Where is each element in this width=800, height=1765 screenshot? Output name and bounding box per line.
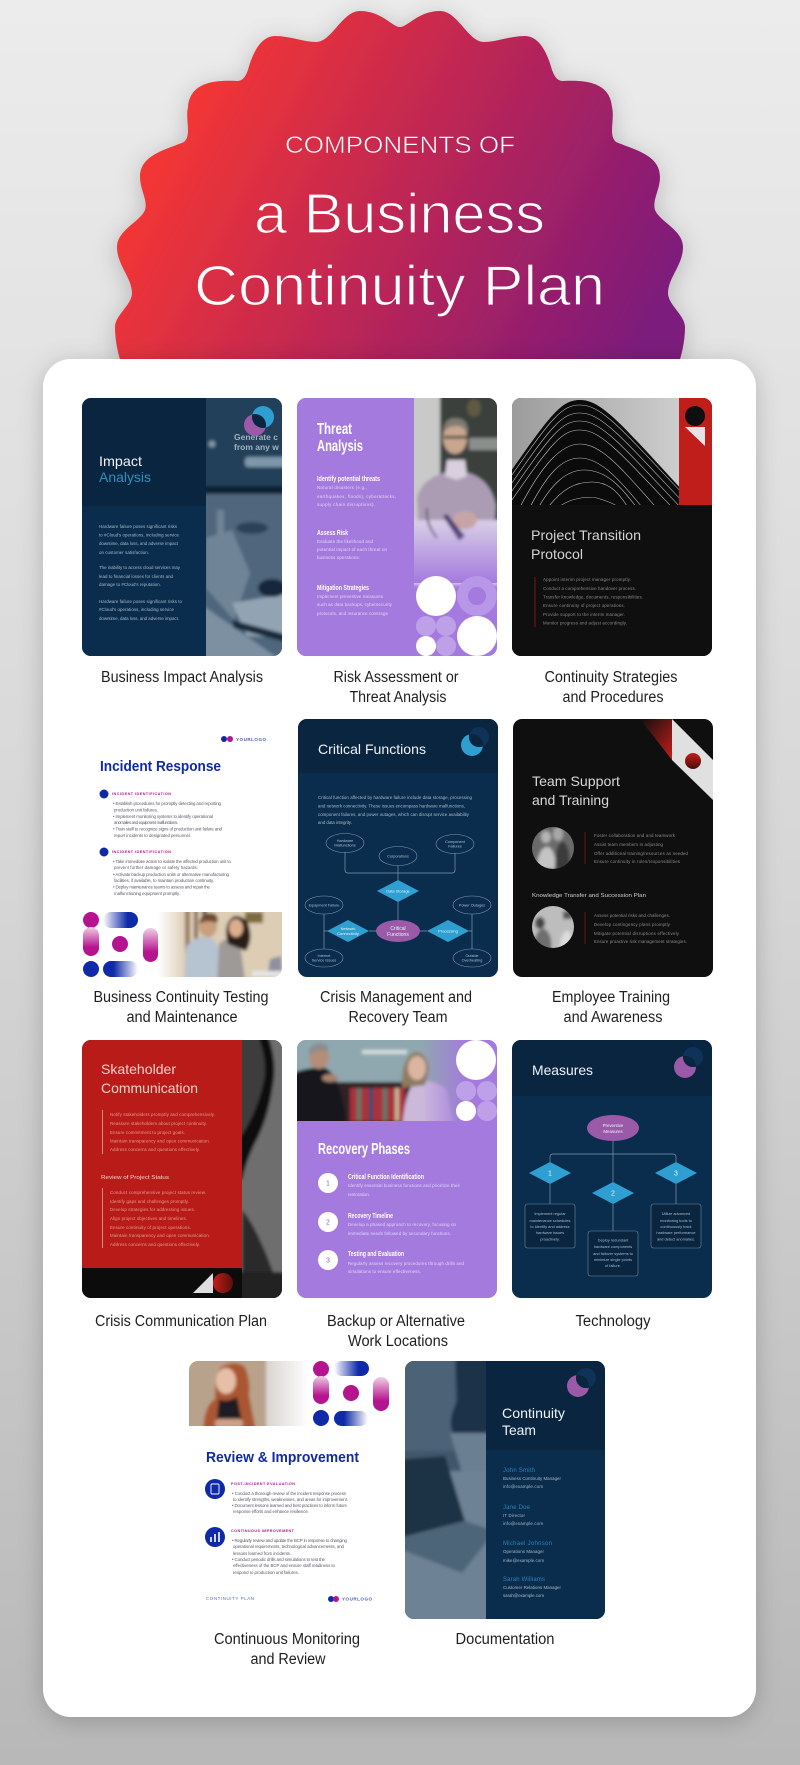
flowchart: proactively. [540,1237,560,1242]
section: post-incident evaluation: • Document lessons learned and best practices to inform future [232,1503,348,1508]
step 1: 1 [326,1180,330,1188]
text block: Appoint interim project manager promptly. [543,577,631,582]
text block: supply chain disruptions). [317,502,375,507]
flowchart: Utilize advanced [662,1211,690,1216]
decorative pills [313,1361,389,1426]
photo: office laptop: from any w [234,442,279,452]
list: second section: malfunctioning equipment promptly. [114,891,180,896]
list: first section: • Establish procedures for promptly detecting and reporting [113,801,222,806]
heading: Measures [532,1062,593,1078]
flowchart: Data Storage [386,888,411,894]
footer: YOURLOGO [342,1596,372,1602]
text block: downtime, data loss, and adverse impact [99,541,179,546]
logo: YOURLOGO [236,737,266,742]
text block: component failures, and power outages, which can disrupt service availability [318,812,470,817]
list: second section: • Take immediate action to isolate the affected production unit to [113,859,232,864]
contact list: Sarah Williams [503,1577,545,1583]
contact list: IT Director [503,1513,526,1518]
text block: on customer satisfaction. [99,550,149,555]
icon: overlapping circles [674,1047,703,1078]
contact list: sarah@example.com [503,1593,544,1598]
captions: and Review [250,1651,326,1668]
flowchart: Implement regular [534,1211,566,1216]
flowchart: hardware components [594,1244,632,1249]
step 3: simulations to ensure effectiveness. [348,1269,421,1274]
list: second section: • Activate backup production units or alternative manufacturing [113,872,230,877]
contact list: info@example.com [503,1521,543,1526]
contact list: Customer Relations Manager [503,1585,562,1590]
text block: Conduct comprehensive project status review. [110,1190,206,1195]
text block: potential impact of each threat on [317,547,388,552]
badge: scalloped title shape [115,11,685,365]
thumbnail: Stakeholder Communication [82,1040,282,1298]
captions: and Awareness [564,1009,663,1026]
section: continuous improvement: CONTINUOUS IMPROVEMENT [231,1529,295,1533]
heading: Recovery Phases [318,1141,410,1158]
flowchart: 1 [548,1170,552,1178]
text block: Monitor progress and adjust accordingly. [543,621,627,626]
heading: Review & Improvement [206,1449,359,1466]
text block: Implement preventive measures [317,594,384,599]
thumbnail: Threat Analysis [297,388,509,656]
section: post-incident evaluation: POST-INCIDENT EVALUATION [231,1482,295,1486]
contact list [503,1468,562,1598]
heading: Critical Functions [318,741,426,757]
section: continuous improvement: effectiveness of the BCP and ensure staff readiness to [233,1563,336,1568]
thumbnail: Team Support and Training [513,719,713,977]
photo: laptop on desk [395,1351,495,1629]
photo: two colleagues [532,827,574,869]
captions: Work Locations [348,1333,448,1350]
icon: overlapping circles [567,1368,596,1397]
heading: Continuity [502,1405,565,1421]
contact list: mike@example.com [503,1558,544,1563]
text block: Mitigation Strategies [317,585,369,592]
captions: Threat Analysis [350,689,447,706]
captions: Crisis Communication Plan [95,1313,267,1330]
text block: Align project objectives and timelines. [110,1216,187,1221]
text block: Address concerns and questions effectively. [110,1242,200,1247]
text block: The inability to access cloud services may [99,565,181,570]
contact list: Michael Johnson [503,1541,552,1547]
flowchart: Service Issues [312,958,336,962]
text block [318,795,473,825]
section: post-incident evaluation: response efforts and enhance resilience. [233,1509,309,1514]
step 3: 3 [326,1258,330,1264]
flowchart: Deploy redundant [598,1238,629,1243]
section: continuous improvement [205,1527,348,1575]
heading [532,776,620,808]
list: second section: • Deploy maintenance teams to assess and repair the [113,884,211,890]
flowchart: Network [341,926,355,931]
flowchart: Functions [387,932,409,938]
section: post-incident evaluation: • Conduct a thorough review of the incident response process [232,1491,347,1496]
text block: damage to #Cloud's reputation. [99,582,161,587]
heading: Protocol [531,546,583,562]
icon: overlapping circles [244,406,274,436]
text block [543,577,643,626]
text block: Provide support to the interim manager. [543,612,625,617]
heading [532,530,640,559]
flowchart: Corporations [387,854,409,858]
flowchart: 3 [674,1170,678,1178]
section: post-incident evaluation [205,1479,348,1514]
text block: Mitigate potential disruptions effectively [594,931,680,936]
flowchart: minimize single points [594,1257,632,1262]
contact list: Business Continuity Manager [503,1476,562,1481]
list: first section: anomalies and equipment malfunctions. [114,820,178,825]
heading [502,1405,565,1438]
heading: Skateholder [101,1061,176,1077]
step 2: 2 [326,1220,330,1226]
title: Continuity Plan [194,254,605,318]
thumbnail: Project Transition Protocol [507,398,712,656]
captions: Employee Training [552,989,670,1006]
photo: couple at laptop [161,912,282,977]
flowchart: Failures [448,844,462,848]
step 2: immediate needs followed by secondary functions. [348,1231,451,1236]
text block: Conduct a comprehensive handover process. [543,586,636,591]
captions: Technology [576,1313,651,1330]
flowchart: Outside [465,954,479,958]
heading: Communication [101,1080,198,1096]
photo: wavy building [242,1040,282,1298]
flowchart [305,834,491,967]
decorative pills [83,912,158,977]
section: post-incident evaluation: to identify strengths, weaknesses, and areas for improvement. [233,1497,348,1502]
heading: Analysis [99,469,151,485]
captions: and Procedures [562,689,664,706]
contact list: Jane Doe [503,1505,531,1511]
flowchart: monitoring tools to [660,1218,692,1223]
text block: Notify stakeholders promptly and comprehensively. [110,1112,215,1117]
icon: chart [205,1527,225,1547]
red panel with shapes [679,398,712,505]
text block: Ensure continuity of project operations. [543,603,625,608]
decorative circles [456,1040,497,1121]
step 3 [318,1250,465,1274]
text block: and data integrity. [318,820,352,825]
text block [110,1112,215,1152]
heading: Incident Response [100,758,221,775]
thumbnail: Recovery Phases [287,1030,497,1298]
text block: Assess Risk [317,530,348,537]
captions: Continuity Strategies [544,669,678,686]
text block: Foster collaboration and and teamwork [594,833,676,838]
list: second section: prevent further damage or safety hazards. [114,865,198,870]
flowchart: Equipment Failure [309,904,339,908]
panel: white card [43,359,756,1717]
text block: Hardware failure poses significant risks to [99,599,183,604]
text block: Offer additional training/resources as needed [594,851,689,856]
text block: Ensure proactive risk management strategies. [594,939,687,944]
section: continuous improvement: • Regularly review and update the BCP in response to changing [232,1538,348,1543]
flowchart: Component [445,840,466,844]
photo: office laptop [206,398,282,656]
flowchart: Measures [603,1129,623,1134]
heading: Project Transition [531,527,641,543]
text block: Assess potential risks and challenges. [594,913,670,918]
text block: to #Cloud's operations, including service [99,533,180,538]
section: continuous improvement: • Conduct periodic drills and simulations to test the [232,1557,326,1562]
flowchart: and failover systems to [593,1251,633,1256]
photo: man with glasses [414,398,497,587]
flowchart [525,1115,701,1276]
text block: Natural disasters (e.g., [317,485,367,490]
photo: smiling woman [179,1351,319,1436]
text block: Ensure commitment to project goals. [110,1130,185,1135]
captions: Business Continuity Testing [94,989,268,1006]
step 1: restoration. [348,1192,370,1197]
list: second section [100,848,232,896]
captions: Recovery Team [348,1009,448,1026]
text block: business operations. [317,555,360,560]
captions [94,669,678,1668]
heading: and Training [532,792,609,808]
list: first section [100,790,223,838]
text block: Develop strategies for addressing issues. [110,1207,195,1212]
icon: overlapping circles [461,727,489,756]
flowchart: Processing [438,928,458,934]
section: continuous improvement: respond to production unit failures. [233,1570,299,1575]
flowchart: Internet [318,954,331,958]
text block: Critical function affected by hardware failure include data storage, processing [318,795,473,800]
captions: and Maintenance [126,1009,238,1026]
list: first section: INCIDENT IDENTIFICATION [112,792,171,796]
heading [99,456,150,485]
heading [317,421,363,455]
flowchart: hardware performance [656,1230,696,1235]
logo [221,736,266,742]
flowchart: Critical [390,926,406,932]
text block: Ensure continuity in roles/responsibilities [594,859,681,864]
list: first section: production unit failures. [114,808,158,812]
text block: Develop contingency plans promptly [594,922,671,927]
text block: such as data backups, cybersecurity [317,602,393,607]
section: continuous improvement: operational requirements, technological advancements, and [233,1544,345,1549]
title: COMPONENTS OF [285,132,515,159]
step 2: Develop a phased approach to recovery, focusing on [348,1222,457,1227]
text block: Transfer knowledge, documents, responsibilities. [543,595,643,600]
heading [102,1064,198,1093]
flowchart: hardware issues [536,1230,564,1235]
photo: office laptop: Generate c [234,432,278,442]
captions: Risk Assessment or [334,669,458,686]
list: second section: INCIDENT IDENTIFICATION [112,850,171,854]
step 2: Recovery Timeline [348,1213,393,1220]
captions: Backup or Alternative [327,1313,465,1330]
subheading: Knowledge Transfer and Succession Plan [532,893,646,899]
text block: Maintain transparency and open communication. [110,1139,210,1144]
flowchart: and detect anomalies. [657,1237,695,1242]
flowchart: Malfunctions [334,844,356,848]
flowchart: of failure. [605,1263,621,1268]
flowchart: Hardware [337,839,353,843]
footer [206,1596,372,1602]
text block [594,833,689,864]
flowchart: 2 [611,1190,615,1198]
flowchart: Overheating [462,958,482,962]
text block: Hardware failure poses significant risks [99,524,178,529]
flowchart: to identify and address [530,1224,570,1229]
title: a Business [254,182,545,246]
photo: curved building [512,398,679,505]
list: second section: facilities, if available, to maintain production continuity. [114,878,214,883]
text block: Assist team members in adjusting [594,842,664,847]
text block: and network connectivity. These issues encompass hardware malfunctions, [318,804,465,808]
captions: Business Impact Analysis [101,669,263,686]
text block: Identify gaps and challenges promptly. [110,1199,189,1204]
text block [317,476,396,616]
thumbnail: Measures [512,1040,712,1298]
thumbnail: Critical Functions [298,719,498,977]
thumbnail: Continuity Team [395,1351,605,1629]
step 1: Identify essential business functions and prioritize their [348,1183,461,1188]
step 3: Regularly assess recovery procedures through drills and [348,1261,465,1266]
text block: downtime, data loss, and adverse impact. [99,616,179,621]
flowchart: maintenance schedules [530,1218,570,1223]
photo: two people on sofa [287,1030,497,1132]
step 1: Critical Function Identification [348,1174,424,1181]
list: first section: report incidents to designated personnel. [114,833,191,838]
text block: earthquakes, floods), cyberattacks, [317,494,396,499]
text block: Evaluate the likelihood and [317,539,374,544]
captions: Continuous Monitoring [214,1631,360,1648]
flowchart: Power Outages [459,904,485,908]
captions: Documentation [456,1631,554,1648]
text block: #Cloud's operations, including service [99,607,175,612]
subheading: Review of Project Status [101,1175,169,1181]
text block: Maintain transparency and open communication. [110,1233,210,1238]
text block [110,1190,210,1247]
title [194,132,605,318]
heading: Team [502,1422,536,1438]
text block [99,524,183,621]
step 2 [318,1212,457,1236]
list: first section: • Implement monitoring systems to identify operational [113,814,213,819]
text block: Ensure continuity of project operations. [110,1225,191,1230]
step 1 [318,1173,461,1197]
text block [594,913,687,944]
flowchart: Connectivity [337,931,359,936]
heading: Analysis [317,438,363,455]
captions: Crisis Management and [320,989,472,1006]
step 3: Testing and Evaluation [348,1251,404,1258]
section: continuous improvement: lessons learned from incidents. [233,1551,291,1556]
list: first section: • Train staff to recognize signs of production unit failure and [113,826,223,832]
text block: Reassure stakeholders about project continuity. [110,1121,207,1126]
heading: Team Support [532,773,620,789]
thumbnail: Review & Improvement [179,1351,389,1619]
thumbnail: Incident Response [83,736,282,977]
corner shapes [193,1273,233,1293]
decorative circles [416,576,497,656]
text block: lead to financial losses for clients and [99,574,174,579]
flowchart: Preventive [603,1123,624,1128]
thumbnail: Impact Analysis [82,398,282,656]
contact list: John Smith [503,1468,535,1474]
footer: CONTINUITY PLAN [206,1596,254,1601]
text block: Address concerns and questions effectively. [110,1147,200,1152]
text block: Identify potential threats [317,476,380,483]
photo: two people at board [532,906,574,948]
heading: Threat [317,421,352,438]
icon: document [205,1479,225,1499]
contact list: info@example.com [503,1484,543,1489]
corner decoration [640,719,713,800]
flowchart: continuously track [660,1224,692,1229]
contact list: Operations Manager [503,1549,545,1554]
text block: protocols, and insurance coverage [317,611,389,616]
heading: Impact [99,453,142,469]
